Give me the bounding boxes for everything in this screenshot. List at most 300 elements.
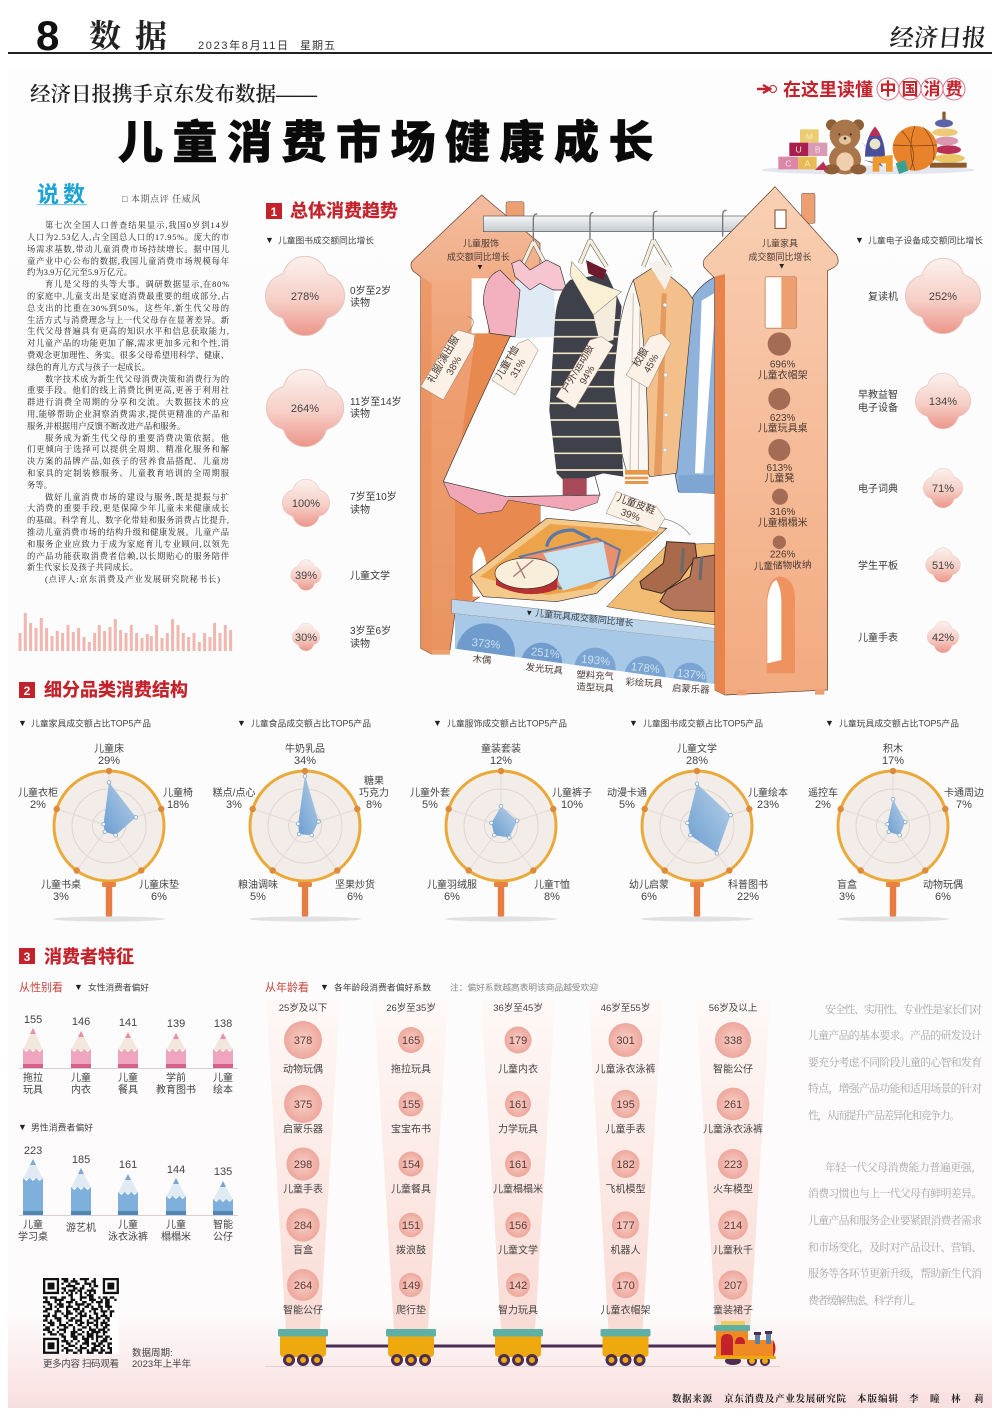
- right panel title: [749, 238, 811, 271]
- radar title: 儿童服饰成交额占比TOP5产品: [447, 718, 567, 728]
- commentary body text: 的产品功能获取消费者信赖,以长期贴心的服务陪伴: [27, 551, 230, 561]
- radar: toys: 17%: [882, 755, 904, 767]
- radar: food: 粮油调味: [238, 878, 278, 891]
- commentary body text: 服务成为新生代父母的重要消费决策依据。他: [45, 433, 230, 443]
- radar: food: 5%: [250, 891, 266, 903]
- right panel title: 成交额同比增长: [749, 251, 811, 262]
- blue toy shelf: 178%: [630, 661, 660, 676]
- heading: by age: 从年龄看: [265, 980, 309, 994]
- subtitle: 经济日报携手京东发布数据——: [30, 83, 317, 106]
- pencil 135: 公仔: [213, 1231, 233, 1243]
- cloud 264%: 264%: [291, 403, 319, 415]
- tag: 39%: 儿童皮鞋: [615, 491, 657, 517]
- furniture bubble: 316%: [758, 489, 808, 529]
- pencil 223: 学习桌: [18, 1230, 48, 1243]
- cloud 134%: 早教益智: [858, 388, 898, 401]
- radar title: ▼: [433, 718, 442, 728]
- toy box with drum and bag: [470, 518, 667, 602]
- toy labels: 启蒙乐器: [672, 682, 710, 695]
- legend title: books: 儿童图书成交额同比增长: [278, 234, 374, 246]
- radar: toys: 积木: [883, 743, 903, 755]
- radar: furniture: 儿童椅: [163, 786, 193, 799]
- tag: 94%: [556, 337, 613, 408]
- cloud 39%: [291, 560, 390, 590]
- age column: 25 and under: 智能公仔: [283, 1304, 323, 1316]
- pencil 185: 游艺机: [66, 1221, 96, 1234]
- age column: 26-35: 爬行垫: [396, 1304, 426, 1316]
- tag: 31%: 31%: [509, 357, 528, 380]
- commentary body text: 新生代家长及孩子共同成长。: [27, 562, 138, 572]
- column tag: read China consumption: 中: [880, 80, 896, 99]
- footer credits: 本版编辑: [857, 1393, 898, 1405]
- text block: right commentary: 性，从而提升产品差异化和竞争力。: [808, 1108, 960, 1122]
- cloud 134%: 134%: [929, 396, 957, 408]
- footer credits: [672, 1393, 984, 1405]
- age column: 46-55: 182: [616, 1159, 635, 1171]
- data period: 2023年上半年: [132, 1358, 192, 1370]
- age column: 26-35: 26岁至35岁: [386, 1002, 436, 1014]
- cloud 30%: 读物: [350, 637, 370, 650]
- chart: book growth clouds: [265, 234, 402, 651]
- commentary body text: 们更倾向于选择可以提供全周期、精准化服务和解: [27, 444, 230, 454]
- column tag: read China consumption: [757, 78, 965, 100]
- age column: 25 and under: 264: [294, 1280, 312, 1292]
- commentary body text: 总支出的比重在30%到50%。这些年,新生代父母的: [27, 303, 229, 313]
- radar: food: 8%: [366, 799, 382, 811]
- cloud 134%: 电子设备: [858, 401, 898, 414]
- age column: 26-35: 149: [402, 1280, 420, 1292]
- commentary body text: 服务,并根据用户反馈不断改进产品和服务。: [27, 421, 185, 431]
- radar: furniture: 儿童床: [94, 742, 124, 755]
- radar: clothing: 12%: [490, 755, 512, 767]
- furniture bubble: 613%: [764, 439, 794, 485]
- cloud 42%: [858, 621, 959, 653]
- heading: section 2: 细分品类消费结构: [44, 680, 188, 700]
- toy labels: 彩绘玩具: [625, 676, 663, 689]
- data period: 数据周期:: [132, 1347, 173, 1359]
- commentary body text: 重要手段。他们的线上消费比例更高,更善于利用社: [27, 385, 230, 395]
- blue toy shelf: 137%: [676, 668, 706, 682]
- age column: 46-55: 177: [616, 1220, 635, 1232]
- cloud 100%: 读物: [350, 503, 370, 516]
- radar: clothing: 5%: [422, 799, 438, 811]
- text block: right commentary: 消费习惯也与上一代父母有鲜明差异。: [808, 1186, 982, 1200]
- date: 2023年8月11日: [198, 38, 288, 52]
- furniture bubble: 623%: 623%: [770, 413, 796, 424]
- commentary body text: 做好儿童消费市场的建设与服务,既是提振与扩: [45, 492, 229, 502]
- pencil 139: 教育图书: [156, 1083, 196, 1096]
- left panel title: ▼: [476, 262, 484, 271]
- furniture bubble: 613%: 儿童凳: [764, 472, 794, 485]
- radar: furniture: 29%: [98, 755, 120, 767]
- age column: 25 and under: 25岁及以下: [279, 1002, 327, 1014]
- radar: toys: 6%: [935, 891, 951, 903]
- icon: toys illustration: C: [785, 158, 791, 168]
- footer credits: 李: [909, 1393, 919, 1405]
- commentary body text: 育儿是父母的头等大事。调研数据显示,在80%: [45, 279, 229, 289]
- radar: food: 牛奶乳品: [285, 742, 325, 755]
- radar: clothing: 10%: [561, 799, 583, 811]
- age column: 36-45: 儿童内衣: [498, 1062, 538, 1076]
- illustration: wardrobe: [411, 187, 838, 697]
- radar: clothing: [410, 718, 592, 922]
- age column: 36-45: 智力玩具: [498, 1304, 538, 1316]
- pencil 185: 185: [72, 1154, 90, 1166]
- radar title: ▼: [629, 718, 638, 728]
- chart: female pencils: [19, 1014, 238, 1096]
- age column: 26-35: [374, 1000, 448, 1364]
- radar: furniture: 儿童书桌: [41, 878, 81, 891]
- age column: 46-55: [588, 1000, 662, 1364]
- commentary body text: 费观念更加理性、务实。很多父母希望用科学、健康、: [27, 350, 229, 360]
- cloud 264%: 读物: [350, 407, 370, 420]
- age column: 56 and over: 儿童泳衣泳裤: [703, 1122, 763, 1136]
- radar: toys: 动物玩偶: [923, 878, 963, 891]
- furniture bubble: 696%: 儿童衣帽架: [758, 368, 808, 381]
- column tag: read China consumption: 消: [924, 80, 940, 99]
- cloud 100%: 100%: [292, 498, 320, 510]
- cloud 51%: [858, 548, 960, 582]
- icon: toys illustration: U: [796, 145, 802, 155]
- pencil 141: 141: [119, 1017, 137, 1029]
- furniture bubble: 226%: [753, 536, 812, 573]
- cloud 252%: [868, 258, 981, 334]
- right panel title: 儿童家具: [762, 238, 798, 249]
- cloud 42%: 儿童手表: [858, 631, 898, 644]
- text block: right commentary: 儿童产品和服务企业要紧跟消费者需求: [808, 1213, 982, 1227]
- label: female preference: 女性消费者偏好: [88, 982, 149, 992]
- clothes rail: [483, 216, 747, 232]
- text block: right commentary: 服务等各环节更新升级，帮助新生代消: [808, 1266, 982, 1280]
- main title: 儿童消费市场健康成长: [118, 117, 663, 168]
- tag: 39%: 39%: [619, 507, 642, 524]
- furniture bubble: 226%: 儿童储物收纳: [753, 559, 812, 573]
- cloud 100%: [282, 479, 397, 527]
- pencil 135: 135: [214, 1166, 232, 1178]
- radar: toys: 2%: [815, 799, 831, 811]
- radar: furniture: 2%: [30, 799, 46, 811]
- age column: 26-35: 儿童餐具: [391, 1182, 431, 1196]
- hangers: [523, 210, 727, 270]
- furniture bubble: 696%: [758, 332, 808, 381]
- radar: toys: 遥控车: [808, 786, 838, 799]
- age column: 56 and over: 童装裙子: [713, 1304, 753, 1316]
- age column: 26-35: 155: [402, 1099, 420, 1111]
- pencil 138: 138: [214, 1018, 232, 1030]
- radar title: 儿童玩具成交额占比TOP5产品: [839, 718, 959, 728]
- radar: food: 糖果: [364, 774, 384, 787]
- age column: 25 and under: 盲盒: [293, 1244, 313, 1256]
- footer credits: 京东消费及产业发展研究院: [724, 1393, 846, 1405]
- tag: 38%: 礼服/演出服: [424, 333, 462, 385]
- radar: books: 动漫卡通: [607, 786, 647, 799]
- commentary body text: 第七次全国人口普查结果显示,我国0岁到14岁: [45, 220, 229, 230]
- text block: right commentary: [808, 1002, 982, 1307]
- commentary body text: 人口为2.53亿人,占全国总人口的17.95%。庞大的市: [27, 232, 229, 242]
- radar: books: 23%: [757, 799, 779, 811]
- icon: toys illustration: A: [804, 158, 810, 168]
- text block: right commentary: 安全性、实用性、专业性是家长们对: [825, 1002, 982, 1016]
- radar: books: 22%: [737, 891, 759, 903]
- furniture bubble: 613%: 613%: [767, 463, 792, 474]
- radar: clothing: 童装套装: [481, 742, 521, 755]
- age column: 25 and under: 284: [294, 1220, 312, 1232]
- tag: 38%: 38%: [445, 355, 464, 377]
- commentary body text: 和家具的定制装修服务、儿童教育培训的全周期服: [27, 468, 230, 478]
- age column: 56 and over: 214: [724, 1220, 742, 1232]
- commentary body text: 约为3.9万亿元至5.9万亿元。: [27, 267, 132, 277]
- cloud 30%: [292, 623, 391, 651]
- age column: 46-55: 儿童泳衣泳裤: [596, 1062, 656, 1076]
- age column: 46-55: 301: [616, 1035, 635, 1047]
- pencil 155: [23, 1014, 43, 1096]
- age column: 36-45: 142: [509, 1280, 527, 1292]
- tag: 39%: [606, 491, 690, 535]
- age column: 56 and over: [696, 1000, 770, 1330]
- pencil 223: 223: [24, 1145, 42, 1157]
- cloud 252%: 252%: [929, 291, 957, 303]
- pencil 144: 144: [167, 1164, 185, 1176]
- age column: 25 and under: 儿童手表: [283, 1182, 323, 1196]
- icon: toys illustration: M: [806, 131, 813, 141]
- blue hoodie: [675, 277, 715, 493]
- age column: 36-45: 161: [509, 1099, 527, 1111]
- column tag: read China consumption: 国: [902, 80, 918, 99]
- commentary body text: 和服务企业应致力于成为家庭育儿专业顾问,以领先: [27, 539, 229, 549]
- radar: books: 科普图书: [728, 878, 768, 891]
- toy labels: 造型玩具: [576, 681, 614, 694]
- radar: toys: [808, 718, 984, 922]
- commentary body text: 的家庭中,儿童支出是家庭消费最重要的组成部分,占: [27, 291, 229, 301]
- toy labels: 塑料充气: [576, 669, 614, 682]
- commentary body text: [27, 220, 230, 584]
- cloud 30%: 3岁至6岁: [350, 624, 391, 637]
- date: 星期五: [300, 39, 335, 52]
- left panel title: [447, 238, 510, 271]
- pencil 144: 榻榻米: [161, 1230, 191, 1243]
- tag: 94%: 94%: [578, 364, 598, 387]
- pencil 144: 儿童: [166, 1218, 186, 1231]
- age column: 25 and under: 378: [294, 1035, 312, 1047]
- text block: right commentary: 要充分考虑不同阶段儿童的心智和发育: [808, 1055, 982, 1069]
- pencil 146: 内衣: [71, 1083, 91, 1096]
- radar: food: 3%: [226, 799, 242, 811]
- pencil 223: 儿童: [23, 1218, 43, 1231]
- radar: books: 28%: [686, 755, 708, 767]
- furniture bubble: 623%: [758, 388, 808, 435]
- cloud 71%: 71%: [932, 483, 954, 495]
- radar: furniture: 3%: [53, 891, 69, 903]
- pencil 141: [118, 1017, 138, 1096]
- pencil 161: 泳衣泳裤: [108, 1230, 148, 1243]
- radar: toys: 盲盒: [837, 878, 857, 891]
- page number: 8: [36, 12, 59, 59]
- furniture bubble: 316%: 316%: [770, 507, 796, 518]
- age column: 56 and over: 207: [724, 1280, 742, 1292]
- age column: 36-45: 156: [509, 1220, 527, 1232]
- commentary body text: 推动儿童消费市场的结构升级和健康发展。儿童产品: [27, 527, 229, 537]
- newspaper masthead: [8, 12, 992, 59]
- age column: 56 and over: 338: [724, 1035, 742, 1047]
- radar: toys: 卡通周边: [944, 786, 984, 799]
- pencil 144: [161, 1164, 191, 1243]
- commentary body text: 群进行消费全周期的分享和交流。大数据技术的应: [27, 397, 229, 407]
- right house panel: [432, 187, 838, 695]
- radar title: 儿童食品成交额占比TOP5产品: [251, 718, 371, 728]
- age column: 56 and over: 智能公仔: [713, 1062, 753, 1076]
- pencil 135: 智能: [213, 1218, 233, 1231]
- age column: 46-55: 儿童衣帽架: [600, 1304, 650, 1316]
- radar: books: 儿童文学: [677, 742, 717, 755]
- radar: furniture: 18%: [167, 799, 189, 811]
- radar: clothing: 8%: [544, 891, 560, 903]
- age column: 26-35: 宝宝布书: [391, 1122, 431, 1136]
- cloud 71%: 电子词典: [858, 482, 898, 495]
- heading: section 3: 3: [24, 950, 31, 964]
- pencil 146: [71, 1016, 91, 1096]
- icon: toys illustration: [762, 112, 975, 174]
- text block: right commentary: 特点，增强产品功能和适用场景的针对: [808, 1081, 982, 1095]
- pencil 138: [213, 1018, 233, 1096]
- cloud 71%: [858, 468, 963, 508]
- age column: 25 and under: 动物玩偶: [283, 1062, 323, 1076]
- pencil 135: [213, 1166, 233, 1243]
- radar: food: 6%: [347, 891, 363, 903]
- cloud 134%: [858, 373, 971, 429]
- pencil 161: 儿童: [118, 1218, 138, 1231]
- cloud 39%: 39%: [295, 570, 317, 582]
- label: male preference: ▼: [18, 1122, 27, 1132]
- legend title: electronics: ▼: [855, 235, 864, 245]
- newspaper logo: 经济日报: [889, 25, 987, 52]
- note: 注：偏好系数越高表明该商品越受欢迎: [450, 982, 598, 992]
- tag: 94%: 户外/运动服: [558, 342, 596, 394]
- date: [198, 38, 335, 52]
- train: connecting bar and ground: [265, 1344, 780, 1367]
- radar: clothing: 儿童T恤: [534, 878, 570, 891]
- heading: shuo shu: 说数: [37, 182, 89, 207]
- toy labels: [472, 653, 710, 695]
- age column: 26-35: 151: [402, 1220, 420, 1232]
- age column: 36-45: 36岁至45岁: [493, 1002, 543, 1014]
- age column: 26-35: 拨浪鼓: [396, 1244, 426, 1256]
- varsity jacket: [613, 260, 693, 484]
- pencil 185: [66, 1154, 96, 1234]
- radar: furniture: 6%: [151, 891, 167, 903]
- heading: section 1: 总体消费趋势: [290, 201, 398, 221]
- radar: books: [607, 718, 788, 922]
- cloud 278%: [265, 256, 391, 336]
- column tag: read China consumption: 费: [946, 80, 962, 99]
- QR caption: 更多内容 扫码观看: [43, 1358, 119, 1370]
- radar: food: 34%: [294, 755, 316, 767]
- radar: books: 5%: [619, 799, 635, 811]
- radar: furniture: [18, 718, 193, 922]
- age column: 36-45: 力学玩具: [498, 1122, 538, 1136]
- tag: 45%: [626, 333, 671, 388]
- age column: 26-35: 154: [402, 1159, 420, 1171]
- tag: 45%: 校服: [630, 345, 651, 369]
- age column: 46-55: 195: [616, 1099, 635, 1111]
- tag: 31%: [492, 339, 538, 395]
- pencil 139: 139: [167, 1018, 185, 1030]
- left house panel: [411, 195, 540, 654]
- commentary body text: 绿色的育儿方式与孩子一起成长。: [27, 362, 150, 372]
- toy labels: 发光玩具: [525, 661, 563, 676]
- radar: clothing: 6%: [444, 891, 460, 903]
- data period: [132, 1347, 192, 1370]
- pencil 155: 155: [24, 1014, 42, 1026]
- cloud 51%: 51%: [932, 560, 954, 572]
- radar: food: 糕点/点心: [213, 786, 255, 799]
- radar: food: 巧克力: [359, 786, 389, 799]
- age column: 36-45: 儿童文学: [498, 1244, 538, 1256]
- pencil 155: 玩具: [23, 1084, 43, 1096]
- cloud 278%: 0岁至2岁: [350, 284, 391, 297]
- legend title: electronics: 儿童电子设备成交额同比增长: [868, 234, 983, 246]
- text block: right commentary: 和市场变化，及时对产品设计、营销、: [808, 1240, 982, 1254]
- radar: furniture: 儿童衣柜: [18, 786, 58, 799]
- radar: toys: 3%: [839, 891, 855, 903]
- commentary body text: 生代父母普遍具有更高的知识水平和信息获取能力,: [27, 326, 229, 336]
- commentary body text: 的基础。科学育儿、数字化带娃和服务消费占比提升,: [27, 515, 229, 525]
- footer credits: 林: [951, 1393, 961, 1405]
- pencil 139: [156, 1018, 196, 1096]
- radar: food: 坚果炒货: [335, 878, 375, 891]
- radar title: 儿童图书成交额占比TOP5产品: [643, 718, 763, 728]
- commentary byline: □ 本期点评 任威风: [122, 193, 201, 204]
- age column: 26-35: 165: [402, 1035, 420, 1047]
- commentary body text: 童产业中心公布的数据,我国儿童消费市场规模每年: [27, 256, 229, 266]
- furniture bubble: 316%: 儿童榻榻米: [758, 516, 808, 529]
- radar title: ▼: [237, 718, 246, 728]
- age column: 56 and over: 56岁及以上: [709, 1002, 758, 1014]
- commentary body text: (点评人:京东消费及产业发展研究院秘书长): [45, 574, 220, 584]
- heading: section 2: 2: [24, 684, 31, 698]
- age column: 46-55: 机器人: [610, 1244, 640, 1256]
- age column: 56 and over: 261: [724, 1099, 742, 1111]
- pencil 161: 161: [119, 1159, 137, 1171]
- blue toy shelf: [452, 599, 715, 697]
- pink white dress: [443, 260, 600, 514]
- commentary body text: 大消费的重要手段,更是保障少年儿童未来健康成长: [27, 503, 229, 513]
- heading: by gender: 从性别看: [19, 980, 63, 994]
- label: female preference: ▼: [74, 982, 83, 992]
- pencil 155: 拖拉: [23, 1071, 43, 1084]
- cloud 51%: 学生平板: [858, 559, 898, 572]
- commentary body text: 数字技术成为新生代父母消费决策和消费行为的: [45, 374, 229, 384]
- commentary body text: 场需求基数,带动儿童消费市场持续增长。据中国儿: [27, 244, 229, 254]
- age column: 36-45: [481, 1000, 555, 1364]
- radar: books: 6%: [641, 891, 657, 903]
- commentary body text: 务等。: [27, 480, 52, 490]
- heading: section 1: 1: [271, 205, 278, 219]
- shoe shelf with boots: [607, 542, 715, 625]
- label: age coefficient: 各年龄段消费者偏好系数: [334, 982, 431, 992]
- icon: train locomotive: [714, 1321, 776, 1365]
- pencil 141: 儿童: [118, 1071, 138, 1084]
- age column: 25 and under: 298: [294, 1159, 312, 1171]
- icon: arrow target: [757, 85, 770, 93]
- text block: right commentary: 费者缓解焦虑、科学育儿。: [808, 1293, 922, 1307]
- tag: 45%: 45%: [642, 352, 662, 375]
- pencil 138: 儿童: [213, 1071, 233, 1084]
- radar title: ▼: [18, 718, 27, 728]
- commentary body text: 决方案的品牌产品,如孩子的营养食品搭配、儿童房: [27, 456, 229, 466]
- furniture bubble: 696%: 696%: [770, 359, 796, 370]
- right panel title: ▼: [778, 262, 786, 271]
- commentary body text: 用,能够帮助企业洞察消费需求,提供更精准的产品和: [27, 409, 229, 419]
